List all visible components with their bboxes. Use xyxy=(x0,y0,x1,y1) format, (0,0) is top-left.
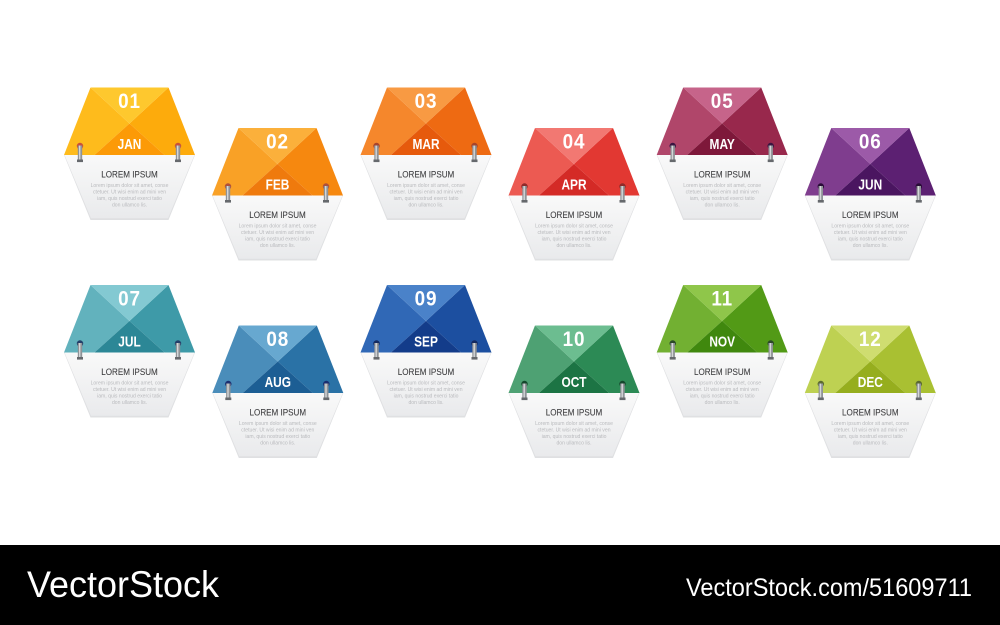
footer url text: VectorStock.com/51609711 xyxy=(686,574,972,602)
body text xyxy=(239,421,317,446)
card: 11 November xyxy=(657,285,788,418)
body text: iam, quis nostrud exerci tatio xyxy=(394,196,459,202)
body text xyxy=(387,183,465,208)
body text: Lorem ipsum dolor sit amet, conse xyxy=(683,380,761,386)
body text: ctetuer. Ut wisi enim ad mini ven xyxy=(537,230,611,236)
body text: ctetuer. Ut wisi enim ad mini ven xyxy=(93,190,166,196)
body text: don ullamco lis. xyxy=(260,440,295,446)
month: APR xyxy=(561,176,587,193)
body text: don ullamco lis. xyxy=(705,400,740,406)
card: 02 February xyxy=(212,128,343,260)
body text: Lorem ipsum dolor sit amet, conse xyxy=(239,421,317,427)
body text: don ullamco lis. xyxy=(556,243,592,249)
footer logo text: VectorStock xyxy=(27,564,219,605)
number: 04 xyxy=(563,131,585,154)
body text: iam, quis nostrud exerci tatio xyxy=(690,394,755,400)
heading: LOREM IPSUM xyxy=(694,169,750,180)
body text xyxy=(239,224,317,249)
heading: LOREM IPSUM xyxy=(694,366,750,377)
body text: iam, quis nostrud exerci tatio xyxy=(542,434,607,440)
body text: ctetuer. Ut wisi enim ad mini ven xyxy=(686,387,759,393)
month: JUN xyxy=(858,176,882,193)
number: 11 xyxy=(711,288,733,311)
body text: Lorem ipsum dolor sit amet, conse xyxy=(535,224,613,230)
body text: iam, quis nostrud exerci tatio xyxy=(838,236,903,242)
month: JUL xyxy=(118,333,141,350)
card: 12 December xyxy=(805,326,936,458)
body text: iam, quis nostrud exerci tatio xyxy=(97,196,162,202)
number: 05 xyxy=(711,90,734,113)
body text: ctetuer. Ut wisi enim ad mini ven xyxy=(834,230,907,236)
heading: LOREM IPSUM xyxy=(842,407,899,418)
body text: iam, quis nostrud exerci tatio xyxy=(97,394,162,400)
card: 08 August xyxy=(212,326,343,458)
body text: don ullamco lis. xyxy=(408,400,444,406)
body text: don ullamco lis. xyxy=(853,440,888,446)
number: 06 xyxy=(859,131,882,154)
body text: Lorem ipsum dolor sit amet, conse xyxy=(387,380,465,386)
number: 02 xyxy=(266,131,289,154)
body text: iam, quis nostrud exerci tatio xyxy=(245,434,310,440)
body text: iam, quis nostrud exerci tatio xyxy=(838,434,903,440)
body text: don ullamco lis. xyxy=(408,202,444,208)
number: 12 xyxy=(859,328,882,351)
card: 09 September xyxy=(360,285,492,418)
month: FEB xyxy=(266,176,289,193)
body text xyxy=(831,421,909,446)
body text xyxy=(683,380,761,406)
body text: don ullamco lis. xyxy=(705,202,740,208)
body text: ctetuer. Ut wisi enim ad mini ven xyxy=(686,190,759,196)
body text: don ullamco lis. xyxy=(112,400,147,406)
body text xyxy=(535,224,613,249)
body text: iam, quis nostrud exerci tatio xyxy=(245,236,310,242)
heading: LOREM IPSUM xyxy=(250,407,306,418)
body text xyxy=(91,380,169,406)
card: 05 May xyxy=(657,88,788,220)
number: 01 xyxy=(118,90,141,113)
body text: ctetuer. Ut wisi enim ad mini ven xyxy=(241,230,314,236)
card: 03 March xyxy=(360,88,492,220)
body text xyxy=(535,421,613,446)
body text: Lorem ipsum dolor sit amet, conse xyxy=(239,224,317,230)
body text: Lorem ipsum dolor sit amet, conse xyxy=(91,380,169,386)
heading: LOREM IPSUM xyxy=(398,169,454,180)
body text xyxy=(831,224,909,249)
month: OCT xyxy=(561,374,587,390)
body text: ctetuer. Ut wisi enim ad mini ven xyxy=(834,428,907,434)
number: 09 xyxy=(415,288,437,311)
month: DEC xyxy=(858,374,883,390)
card: 07 July xyxy=(64,285,195,418)
body text: ctetuer. Ut wisi enim ad mini ven xyxy=(389,190,463,196)
body text: Lorem ipsum dolor sit amet, conse xyxy=(387,183,465,189)
body text: Lorem ipsum dolor sit amet, conse xyxy=(831,224,909,230)
body text: Lorem ipsum dolor sit amet, conse xyxy=(535,421,613,427)
heading: LOREM IPSUM xyxy=(249,209,306,220)
card: 10 October xyxy=(508,326,640,458)
body text: don ullamco lis. xyxy=(556,440,592,446)
body text: Lorem ipsum dolor sit amet, conse xyxy=(683,183,761,189)
body text: Lorem ipsum dolor sit amet, conse xyxy=(91,183,169,189)
number: 03 xyxy=(415,90,437,113)
body text: iam, quis nostrud exerci tatio xyxy=(542,236,607,242)
heading: LOREM IPSUM xyxy=(398,366,454,377)
body text: ctetuer. Ut wisi enim ad mini ven xyxy=(389,387,463,393)
month: NOV xyxy=(709,333,735,350)
month: MAY xyxy=(710,136,735,152)
body text xyxy=(387,380,465,406)
month: MAR xyxy=(412,136,440,152)
card: 06 June xyxy=(805,128,936,260)
card: 01 January xyxy=(64,88,195,220)
number: 07 xyxy=(118,288,141,311)
body text xyxy=(683,183,761,208)
heading: LOREM IPSUM xyxy=(546,209,602,220)
body text: iam, quis nostrud exerci tatio xyxy=(394,394,459,400)
body text: iam, quis nostrud exerci tatio xyxy=(690,196,755,202)
body text: don ullamco lis. xyxy=(112,202,147,208)
number: 08 xyxy=(266,328,289,351)
body text xyxy=(91,183,169,208)
heading: LOREM IPSUM xyxy=(546,407,602,418)
body text: don ullamco lis. xyxy=(853,243,888,249)
body text: Lorem ipsum dolor sit amet, conse xyxy=(831,421,909,427)
heading: LOREM IPSUM xyxy=(842,209,899,220)
heading: LOREM IPSUM xyxy=(101,169,158,180)
body text: ctetuer. Ut wisi enim ad mini ven xyxy=(241,428,314,434)
body text: don ullamco lis. xyxy=(260,243,295,249)
heading: LOREM IPSUM xyxy=(101,366,158,377)
month: JAN xyxy=(118,136,141,152)
card: 04 April xyxy=(508,128,640,260)
month: SEP xyxy=(414,333,438,350)
month: AUG xyxy=(265,374,291,390)
body text: ctetuer. Ut wisi enim ad mini ven xyxy=(537,428,611,434)
body text: ctetuer. Ut wisi enim ad mini ven xyxy=(93,387,166,393)
footer bar xyxy=(0,545,1000,625)
number: 10 xyxy=(563,328,585,351)
